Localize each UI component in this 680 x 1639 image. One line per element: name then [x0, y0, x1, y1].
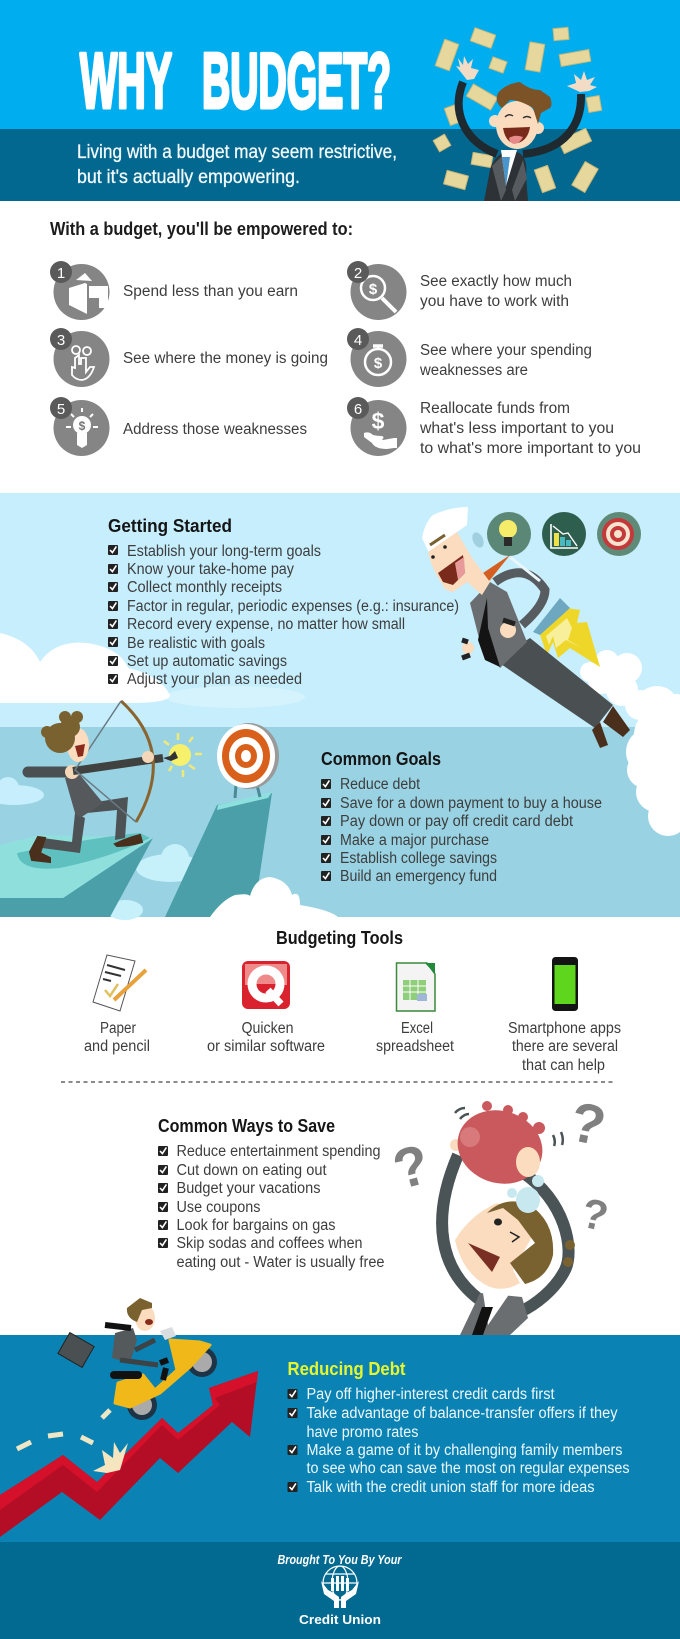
title: WHY: [80, 36, 172, 124]
item 3: [50, 328, 328, 387]
item 4: weaknesses are: [419, 362, 528, 379]
tool labels: that can help: [522, 1057, 605, 1074]
list: common goals: Build an emergency fund: [340, 868, 497, 885]
cloud: upper left: [0, 633, 170, 703]
list: getting started: Collect monthly receipts: [127, 579, 282, 596]
illustration: archer: [28, 701, 202, 862]
icon: credit union logo: [321, 1566, 359, 1608]
item 6: 6: [354, 401, 362, 418]
icon: wallet: [69, 273, 108, 314]
list: reducing debt: have promo rates: [306, 1424, 419, 1441]
tool labels: there are several: [512, 1038, 618, 1055]
illustration: man on scooter: [105, 1298, 217, 1420]
tool labels: Paper: [100, 1020, 136, 1037]
item 5: $: [79, 419, 86, 433]
panel: sky background: [0, 493, 680, 920]
list: getting started: Know your take-home pay: [127, 561, 294, 578]
cloud: bottom white: [210, 877, 338, 917]
item 4: [347, 328, 592, 387]
heading: empowered: With a budget, you'll be empowered to:: [50, 218, 353, 239]
heading: common ways to save: Common Ways to Save: [158, 1115, 335, 1136]
panel: footer: [0, 1542, 680, 1639]
icon: hand with dollar: [364, 432, 397, 449]
list: getting started: Record every expense, no matter how small: [127, 616, 405, 633]
list: common goals: Save for a down payment to buy a house: [340, 795, 602, 812]
list: reducing debt: Talk with the credit union staff for more ideas: [306, 1479, 595, 1496]
tool labels: spreadsheet: [376, 1038, 455, 1055]
list: reducing debt: Make a game of it by challenging family members: [306, 1442, 623, 1459]
item 1: 1: [57, 265, 65, 282]
icon: target: [217, 723, 279, 798]
item 6: Reallocate funds from: [420, 400, 570, 417]
icon: light bulb: [66, 408, 98, 448]
list: common ways to save: Look for bargains on gas: [176, 1217, 336, 1234]
item 4: $: [374, 355, 383, 372]
list: getting started: [108, 543, 459, 688]
list: reducing debt: Take advantage of balance-transfer offers if they: [306, 1405, 618, 1422]
icon: green lightbulb: [487, 512, 531, 556]
cloud: behind cliffs: [107, 844, 204, 920]
list: common goals: Pay down or pay off credit card debt: [340, 813, 574, 830]
tool labels: Excel: [401, 1020, 433, 1037]
item 2: $: [369, 281, 378, 298]
list: common goals: Make a major purchase: [340, 832, 489, 849]
illustration: happy man: [456, 56, 597, 201]
heading: reducing debt: Reducing Debt: [288, 1358, 406, 1379]
illustration: man with piggy bank: [386, 1089, 612, 1335]
item 1: Spend less than you earn: [123, 283, 298, 300]
list: common ways to save: Reduce entertainment spending: [176, 1143, 380, 1160]
tool labels: Smartphone apps: [508, 1020, 621, 1037]
icon: briefcase: [58, 1333, 94, 1367]
icon: impact burst: [93, 1442, 128, 1473]
list: common ways to save: [158, 1143, 384, 1271]
cliff: right: [165, 792, 272, 917]
dashed path: [17, 1410, 110, 1449]
brought to you by: Brought To You By Your: [278, 1552, 402, 1567]
icon: stopwatch: [365, 346, 391, 375]
tool labels: and pencil: [84, 1038, 150, 1055]
item 6: to what's more important to you: [420, 440, 641, 457]
icon: hand with coins: [72, 346, 94, 380]
item 5: 5: [57, 401, 65, 418]
item 2: See exactly how much: [420, 273, 572, 290]
credit union name: Credit Union: [299, 1612, 381, 1627]
list: getting started: Be realistic with goals: [127, 635, 265, 652]
list: getting started: Set up automatic savings: [127, 653, 287, 670]
list: common goals: [321, 776, 602, 885]
list: reducing debt: to see who can save the most on regular expenses: [306, 1460, 630, 1477]
item 3: See where the money is going: [123, 350, 328, 367]
illustration: man with piggy bank: ?: [577, 1189, 612, 1240]
subtitle: [77, 141, 397, 188]
list: getting started: Establish your long-term goals: [127, 543, 321, 560]
item 6: what's less important to you: [419, 420, 614, 437]
panel: reducing debt: [0, 1298, 680, 1542]
heading: getting started: Getting Started: [108, 515, 232, 536]
list: common ways to save: eating out - Water is usually free: [176, 1254, 384, 1271]
item 6: [347, 397, 641, 457]
list: common ways to save: Use coupons: [176, 1199, 261, 1216]
tool labels: or similar software: [207, 1038, 325, 1055]
title: BUDGET?: [202, 36, 391, 124]
illustration: man with piggy bank: ?: [565, 1089, 611, 1158]
list: common ways to save: Cut down on eating out: [176, 1162, 327, 1179]
cloud: jetpack exhaust: [580, 650, 680, 836]
heading: budgeting tools: Budgeting Tools: [276, 927, 403, 948]
item 5: Address those weaknesses: [123, 421, 307, 438]
arrow: rising red chart: [0, 1371, 258, 1537]
item 6: $: [372, 408, 385, 434]
illustration: jetpack man: [422, 507, 630, 748]
title: [80, 36, 391, 124]
icon: spreadsheet: [396, 963, 435, 1011]
list: common ways to save: Budget your vacations: [176, 1180, 321, 1197]
item 2: [347, 261, 572, 320]
list: getting started: Factor in regular, periodic expenses (e.g.: insurance): [127, 598, 459, 615]
subtitle: Living with a budget may seem restrictive,: [77, 141, 397, 163]
panel: header: [0, 0, 680, 201]
item 3: 3: [57, 332, 65, 349]
list: common goals: Establish college savings: [340, 850, 497, 867]
icon: paper and pencil: [93, 955, 146, 1011]
cliff: left: [0, 833, 153, 917]
item 1: [50, 261, 298, 320]
heading: common goals: Common Goals: [321, 748, 441, 769]
list: common goals: Reduce debt: [340, 776, 421, 793]
list: reducing debt: Pay off higher-interest credit cards first: [306, 1386, 555, 1403]
subtitle: but it's actually empowering.: [77, 166, 300, 188]
icon: smartphone: [552, 957, 578, 1011]
tool labels: [84, 1020, 621, 1074]
tool labels: Quicken: [242, 1020, 294, 1037]
item 2: 2: [354, 265, 362, 282]
item 2: you have to work with: [420, 293, 569, 310]
illustration: man with piggy bank: ?: [386, 1132, 436, 1201]
cloud: small blue left: [0, 777, 44, 805]
icon: falling money bills: [433, 27, 602, 193]
item 5: [50, 397, 307, 456]
icon: green target: [597, 512, 641, 556]
icon: magnifier: [361, 276, 396, 312]
icon: green chart: [542, 512, 586, 556]
list: reducing debt: [288, 1386, 630, 1496]
icon: quicken: [242, 961, 290, 1009]
list: getting started: Adjust your plan as needed: [127, 671, 302, 688]
item 4: 4: [354, 332, 362, 349]
list: common ways to save: Skip sodas and coffees when: [176, 1235, 362, 1252]
item 4: See where your spending: [420, 342, 592, 359]
